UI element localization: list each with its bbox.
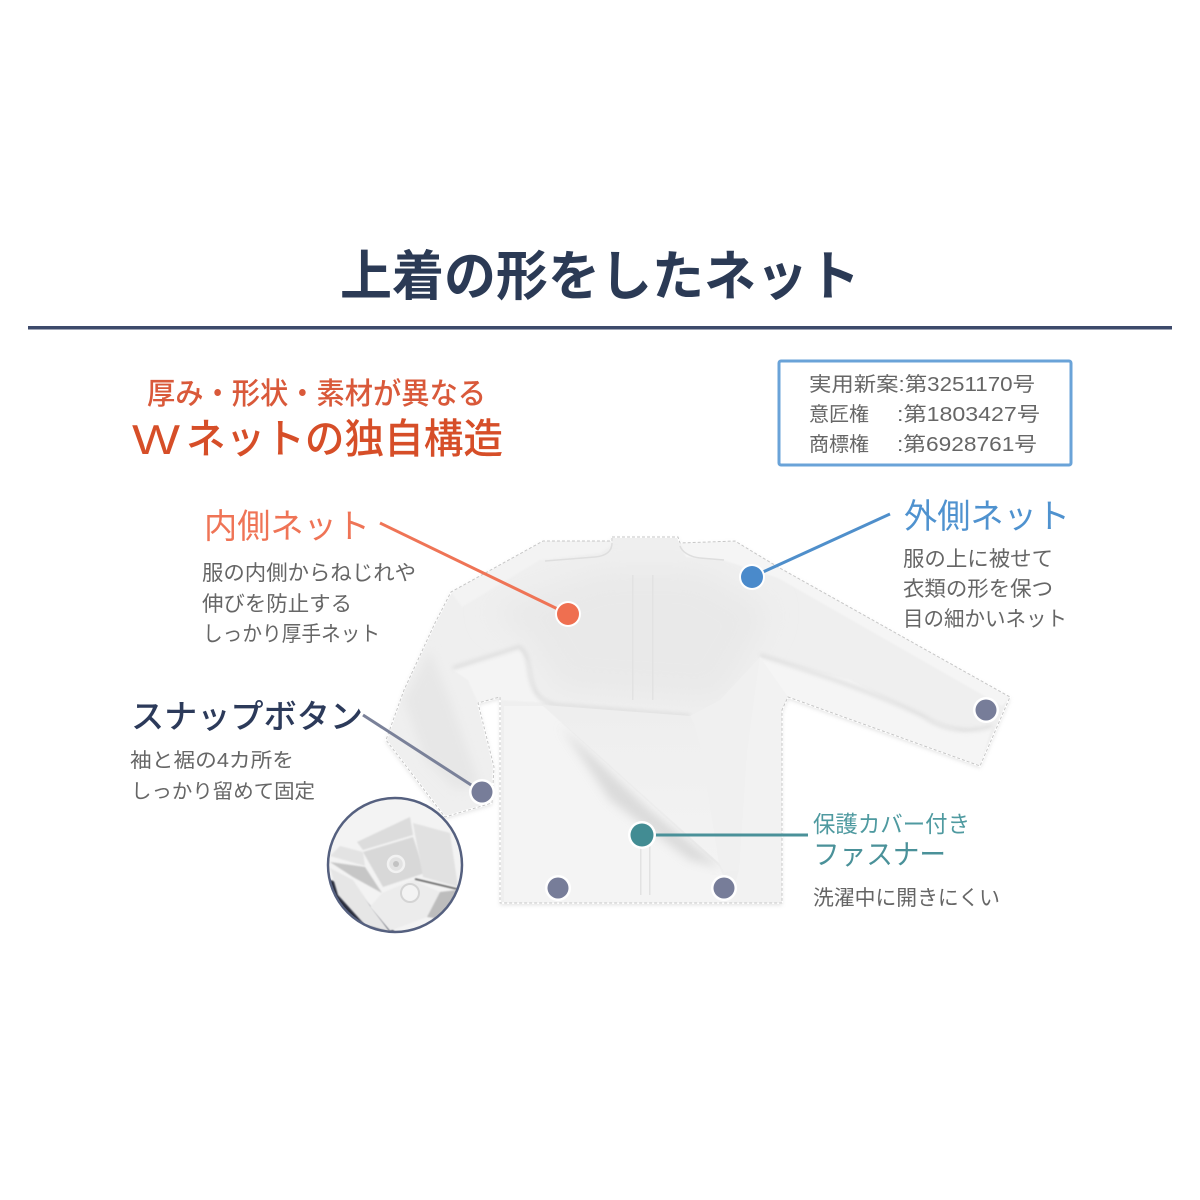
callout: outer net: 服の上に被せて [903, 548, 1053, 571]
snap dot: left cuff [469, 779, 495, 805]
callout: outer net [739, 498, 1070, 631]
patent box [779, 361, 1071, 465]
centre placket [632, 575, 634, 700]
heading: W net structure [132, 378, 503, 463]
collar notches [545, 543, 612, 561]
callout: zipper: 保護カバー付き [813, 811, 970, 837]
shoulder seam bands [452, 541, 612, 592]
right strip [734, 711, 782, 903]
left under-sleeve [480, 696, 501, 702]
callout: zipper: 洗濯中に開きにくい [813, 887, 1000, 910]
callout: outer net: 外側ネット [904, 498, 1070, 536]
folded flap [560, 706, 716, 860]
callout: snap buttons: 袖と裾の4カ所を [130, 749, 294, 772]
soft shading on chest [490, 570, 770, 700]
callout: outer net: 目の細かいネット [903, 608, 1067, 631]
callout: outer net: 衣類の形を保つ [903, 578, 1053, 601]
lower panel [504, 902, 730, 903]
callout: inner net: 伸びを防止する [202, 593, 352, 616]
callout: inner net: 内側ネット [204, 508, 370, 546]
diagonal flap shadow [571, 738, 714, 866]
snap dot: hem right [711, 875, 737, 901]
left sleeve shading [404, 650, 480, 790]
callout: snap buttons: スナップボタン [131, 698, 363, 735]
title divider [28, 326, 1172, 330]
callout: inner net: 服の内側からねじれや [202, 562, 416, 585]
snap dot: hem left [545, 875, 571, 901]
callout: zipper: ファスナー [813, 839, 946, 870]
snap dot: right cuff [973, 697, 999, 723]
heading: W net structure: 厚み・形状・素材が異なる [147, 378, 486, 411]
callout: zipper [628, 811, 1000, 910]
callout: snap buttons [130, 698, 495, 805]
patent box: 意匠権 [809, 403, 869, 426]
patent box: 実用新案:第3251170号 [809, 373, 1035, 396]
heading: W net structure: ネットの独自構造 [186, 416, 503, 462]
patent box: 商標権 [809, 433, 869, 456]
callout: snap buttons: しっかり留めて固定 [131, 780, 315, 803]
title: 上着の形をしたネット [340, 247, 860, 307]
callout: inner net: しっかり厚手ネット [203, 623, 380, 646]
stitched edge [386, 537, 1010, 903]
fold shadow: right [760, 655, 992, 730]
fold shadow: left [453, 647, 690, 716]
jacket illustration [386, 537, 1010, 905]
right under-sleeve [788, 696, 979, 765]
callout: inner net [202, 508, 581, 646]
heading: W net structure: W [132, 416, 180, 463]
patent box: :第1803427号 [897, 403, 1040, 426]
patent box: :第6928761号 [897, 433, 1037, 456]
snap button photo inset [322, 798, 462, 935]
